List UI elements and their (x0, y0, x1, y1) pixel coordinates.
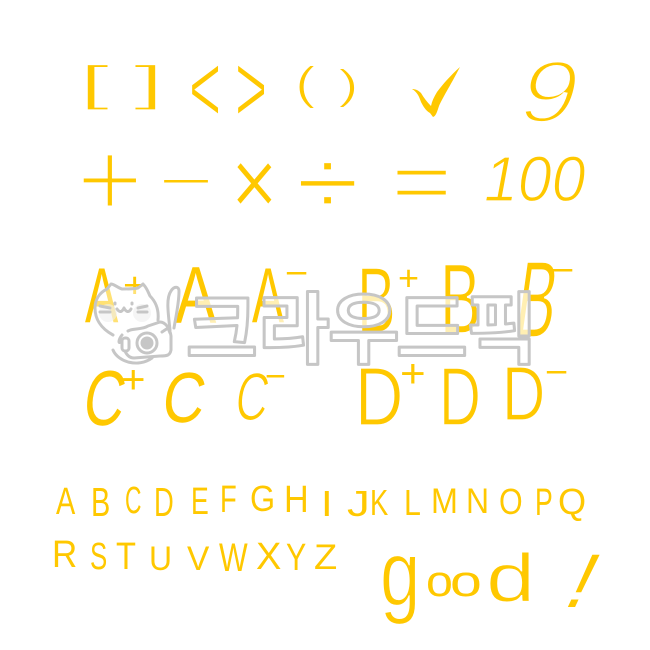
alphabet row: A to Q: K (370, 482, 389, 523)
alphabet row: A to Q: A (56, 480, 76, 523)
alphabet row: A to Q: B (91, 479, 110, 525)
alphabet row: A to Q: E (191, 479, 209, 522)
watermark: cat with camera and wordmark (95, 284, 538, 374)
symbols row: arithmetic: ÷ (296, 130, 359, 236)
alphabet row: A to Q: O (499, 483, 523, 523)
grades row: A B (85, 239, 574, 360)
alphabet row: A to Q: I (321, 483, 333, 524)
grades row: C D: − (545, 352, 568, 391)
symbols row: brackets (78, 33, 359, 143)
score: 100: 100 (484, 144, 586, 215)
symbols row: brackets: < (189, 33, 221, 143)
grades row: A B: A (252, 251, 285, 339)
grades row: A B: + (123, 265, 146, 304)
alphabet row: A to Q: F (220, 479, 237, 521)
grades row: A B: A (175, 251, 216, 341)
grades row: A B: + (398, 258, 419, 298)
word: good!: o (450, 556, 482, 605)
alphabet row: R to Z: U (149, 540, 172, 578)
grades row: C D: C (158, 358, 211, 437)
symbols row: arithmetic: − (160, 162, 213, 201)
symbols row: arithmetic: + (76, 118, 144, 240)
alphabet row: A to Q: M (431, 483, 458, 521)
alphabet row: A to Q: Q (558, 481, 586, 522)
symbols row: brackets: ) (338, 62, 359, 109)
symbol: nine: 9 (509, 42, 592, 141)
grades row: C D: + (400, 351, 426, 396)
alphabet row: A to Q: N (466, 483, 489, 521)
alphabet row: R to Z: R (52, 533, 77, 575)
word: good!: d (486, 540, 535, 616)
alphabet row: R to Z: S (90, 535, 107, 577)
symbols row: brackets: > (235, 33, 267, 143)
alphabet row: A to Q: L (404, 483, 421, 524)
grades row: C D: D (439, 351, 481, 444)
alphabet row: A to Q: C (125, 479, 141, 521)
grades row: A B: B (440, 245, 481, 355)
alphabet row: A to Q (56, 477, 586, 525)
alphabet row: R to Z: T (116, 535, 136, 578)
icon: cat with camera (95, 284, 179, 363)
word: good!: o (426, 556, 453, 606)
grades row: C D: C (79, 355, 131, 442)
grades row: C D: C (231, 359, 274, 435)
symbols row: brackets: [ (78, 56, 110, 111)
alphabet row: R to Z: Z (314, 537, 337, 577)
grades row: A B: A (85, 252, 119, 339)
grades row: A B: B (509, 239, 566, 360)
alphabet row: R to Z (52, 533, 337, 580)
wordmark: 크라우드픽 (186, 286, 538, 374)
alphabet row: R to Z: W (219, 535, 248, 580)
symbols row: arithmetic (76, 118, 452, 240)
alphabet row: R to Z: X (256, 536, 281, 578)
grades row: A B: − (551, 250, 574, 289)
symbols row: arithmetic: × (231, 128, 278, 236)
word: good!: g (380, 521, 420, 625)
icon: check mark (412, 67, 460, 117)
grades row: A B: B (357, 249, 396, 352)
symbols row: brackets: ] (133, 56, 165, 111)
alphabet row: R to Z: Y (286, 537, 306, 579)
symbols row: brackets: ( (295, 58, 316, 109)
grades row: C D: D (502, 351, 545, 437)
grades row: A B: − (285, 253, 308, 292)
alphabet row: A to Q: G (250, 479, 275, 519)
alphabet row: A to Q: P (535, 480, 553, 523)
grades row: C D (79, 350, 568, 444)
alphabet row: A to Q: H (284, 477, 309, 520)
word: good!: ! (553, 539, 614, 623)
grades row: C D: D (355, 350, 403, 443)
alphabet row: R to Z: V (187, 540, 210, 578)
alphabet row: A to Q: J (347, 483, 370, 524)
word: good! (380, 521, 614, 625)
grades row: C D: + (121, 357, 146, 402)
symbols row: arithmetic: = (391, 137, 452, 226)
alphabet row: A to Q: D (154, 480, 174, 525)
grades row: C D: − (265, 356, 286, 396)
